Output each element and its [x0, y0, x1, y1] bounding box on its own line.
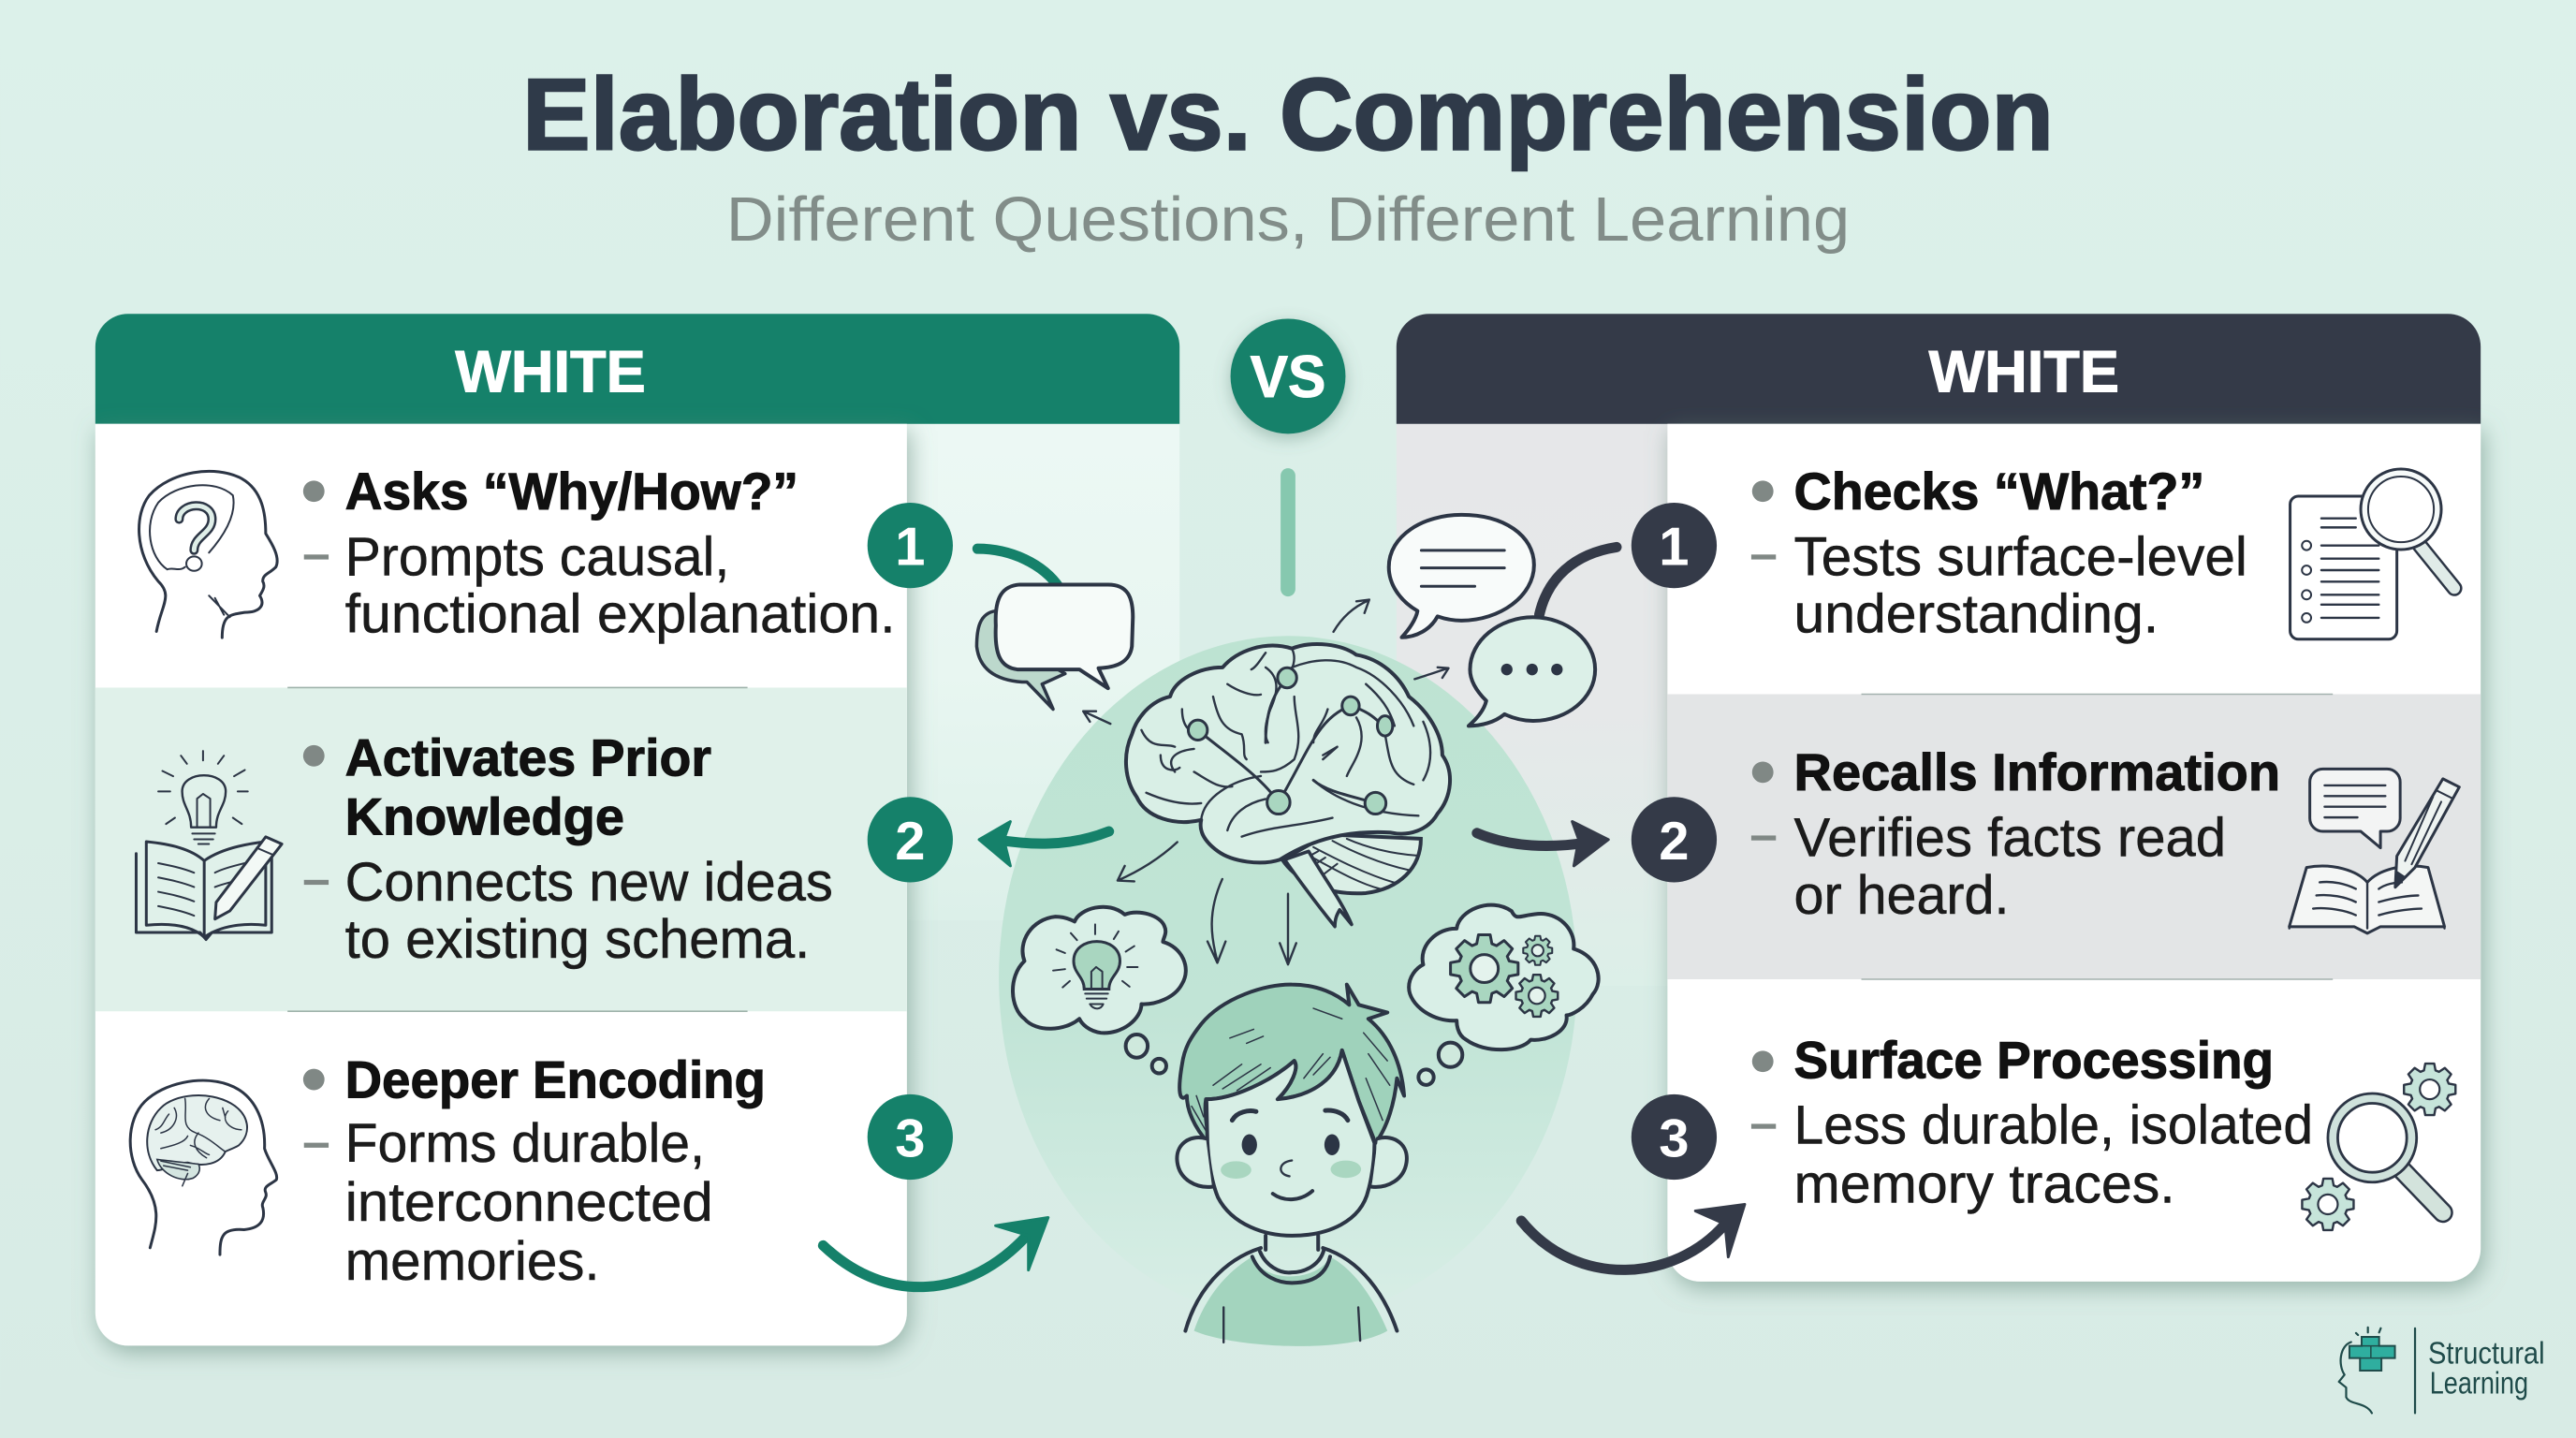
- right lower bubble: [1469, 617, 1595, 726]
- row 2 text: or heard.: [1794, 865, 2009, 926]
- badges: right numbers: [1632, 503, 1717, 1180]
- row 2 text: Recalls Information: [1794, 743, 2280, 801]
- icon: open book, bulb and pencil: [136, 751, 282, 940]
- boy hair strands: [1192, 1008, 1390, 1131]
- badges: right numbers: 2: [1659, 812, 1690, 872]
- subtitle: Different Questions, Different Learning: [726, 185, 1850, 255]
- badges: left numbers: 1: [895, 518, 925, 578]
- badges: right numbers: 3: [1659, 1109, 1690, 1169]
- row 3 text: memories.: [345, 1231, 600, 1292]
- row 3 text: [1751, 1031, 2313, 1215]
- icon: magnifier with gears: [2302, 1064, 2455, 1230]
- boy face: [1207, 1050, 1374, 1236]
- arrow: left 3: [823, 1217, 1048, 1287]
- boy ears: [1177, 1137, 1407, 1187]
- icon: checklist and magnifier: [2291, 469, 2454, 639]
- logo: Structural Learning: Structural: [2428, 1337, 2545, 1372]
- vertical connector: [1281, 468, 1295, 596]
- row 1 text: Asks “Why/How?”: [345, 462, 798, 521]
- icon: head with brain: [130, 1080, 277, 1255]
- row 3 text: Forms durable,: [345, 1113, 705, 1174]
- central halo circle: [999, 636, 1577, 1319]
- row 1 text: Tests surface-level: [1794, 526, 2247, 587]
- thought bubbles right: [1418, 1043, 1462, 1085]
- boy shirt and neck: [1185, 1236, 1397, 1346]
- row 3 text: [303, 1050, 766, 1292]
- arrows: brain down to boy: [1208, 879, 1296, 964]
- arrow: right 1: [1540, 547, 1617, 614]
- row 1 text: [303, 462, 896, 645]
- row 2 text: Knowledge: [345, 788, 624, 846]
- row 1 text: Checks “What?”: [1794, 462, 2204, 521]
- row 3 text: interconnected: [345, 1172, 713, 1233]
- panel: right column backing: WHITE: [1928, 340, 2119, 405]
- row 3 text: Surface Processing: [1794, 1031, 2274, 1089]
- logo: Structural Learning: Learning: [2430, 1366, 2528, 1401]
- row 2 text: Verifies facts read: [1794, 807, 2226, 868]
- badges: left numbers: [868, 503, 953, 1180]
- row 3 text: Less durable, isolated: [1794, 1094, 2313, 1155]
- row 2 text: [1751, 743, 2280, 926]
- panel: left column backing: [95, 314, 1179, 920]
- small arrows: [1083, 600, 1449, 881]
- panel: left column backing: WHITE: [455, 340, 646, 405]
- illustration: speech bubbles and small arrows: [976, 515, 1595, 881]
- right upper bubble: [1389, 515, 1534, 638]
- arrow: left 1 into bubble: [977, 549, 1060, 588]
- title: Elaboration vs. Comprehension: [522, 58, 2054, 172]
- row 2 text: to existing schema.: [345, 909, 810, 970]
- panel: right column backing: [1397, 314, 2481, 986]
- panel: left card: [95, 424, 907, 1345]
- row 2 text: Activates Prior: [345, 728, 711, 786]
- badges: left numbers: 3: [895, 1109, 925, 1169]
- arrow: left 2: [979, 822, 1109, 866]
- left back bubble: [976, 611, 1065, 709]
- boy facial features: [1221, 1110, 1361, 1199]
- arrow: right 2: [1477, 822, 1608, 866]
- row 3 text: Deeper Encoding: [345, 1050, 766, 1108]
- icon: speech bubble, pencil and book: [2290, 769, 2459, 933]
- row 1 text: Prompts causal,: [345, 526, 729, 587]
- row 1 text: functional explanation.: [345, 584, 896, 645]
- illustration: brain: [1126, 644, 1450, 927]
- VS badge: VS: [1251, 345, 1325, 410]
- row 3 text: memory traces.: [1794, 1154, 2175, 1215]
- icon: head with question mark: [139, 471, 277, 638]
- panel: right card: [1667, 424, 2481, 1282]
- row 2 text: [303, 728, 833, 970]
- logo: Structural Learning: [2339, 1328, 2545, 1413]
- badges: right numbers: 1: [1659, 518, 1690, 578]
- boy hair: [1179, 985, 1404, 1143]
- left front bubble: [996, 584, 1133, 688]
- row 1 text: [1751, 462, 2247, 645]
- row 2 text: Connects new ideas: [345, 852, 833, 913]
- illustration: thought clouds and boy: [1013, 905, 1599, 1346]
- left thought cloud with lightbulb: [1013, 907, 1186, 1074]
- row 1 text: understanding.: [1794, 584, 2159, 645]
- arrow: right 3: [1521, 1204, 1745, 1269]
- VS badge: [1231, 318, 1345, 433]
- right thought cloud outline: [1409, 905, 1599, 1049]
- gears in right cloud: [1451, 934, 1558, 1017]
- badges: left numbers: 2: [895, 812, 925, 872]
